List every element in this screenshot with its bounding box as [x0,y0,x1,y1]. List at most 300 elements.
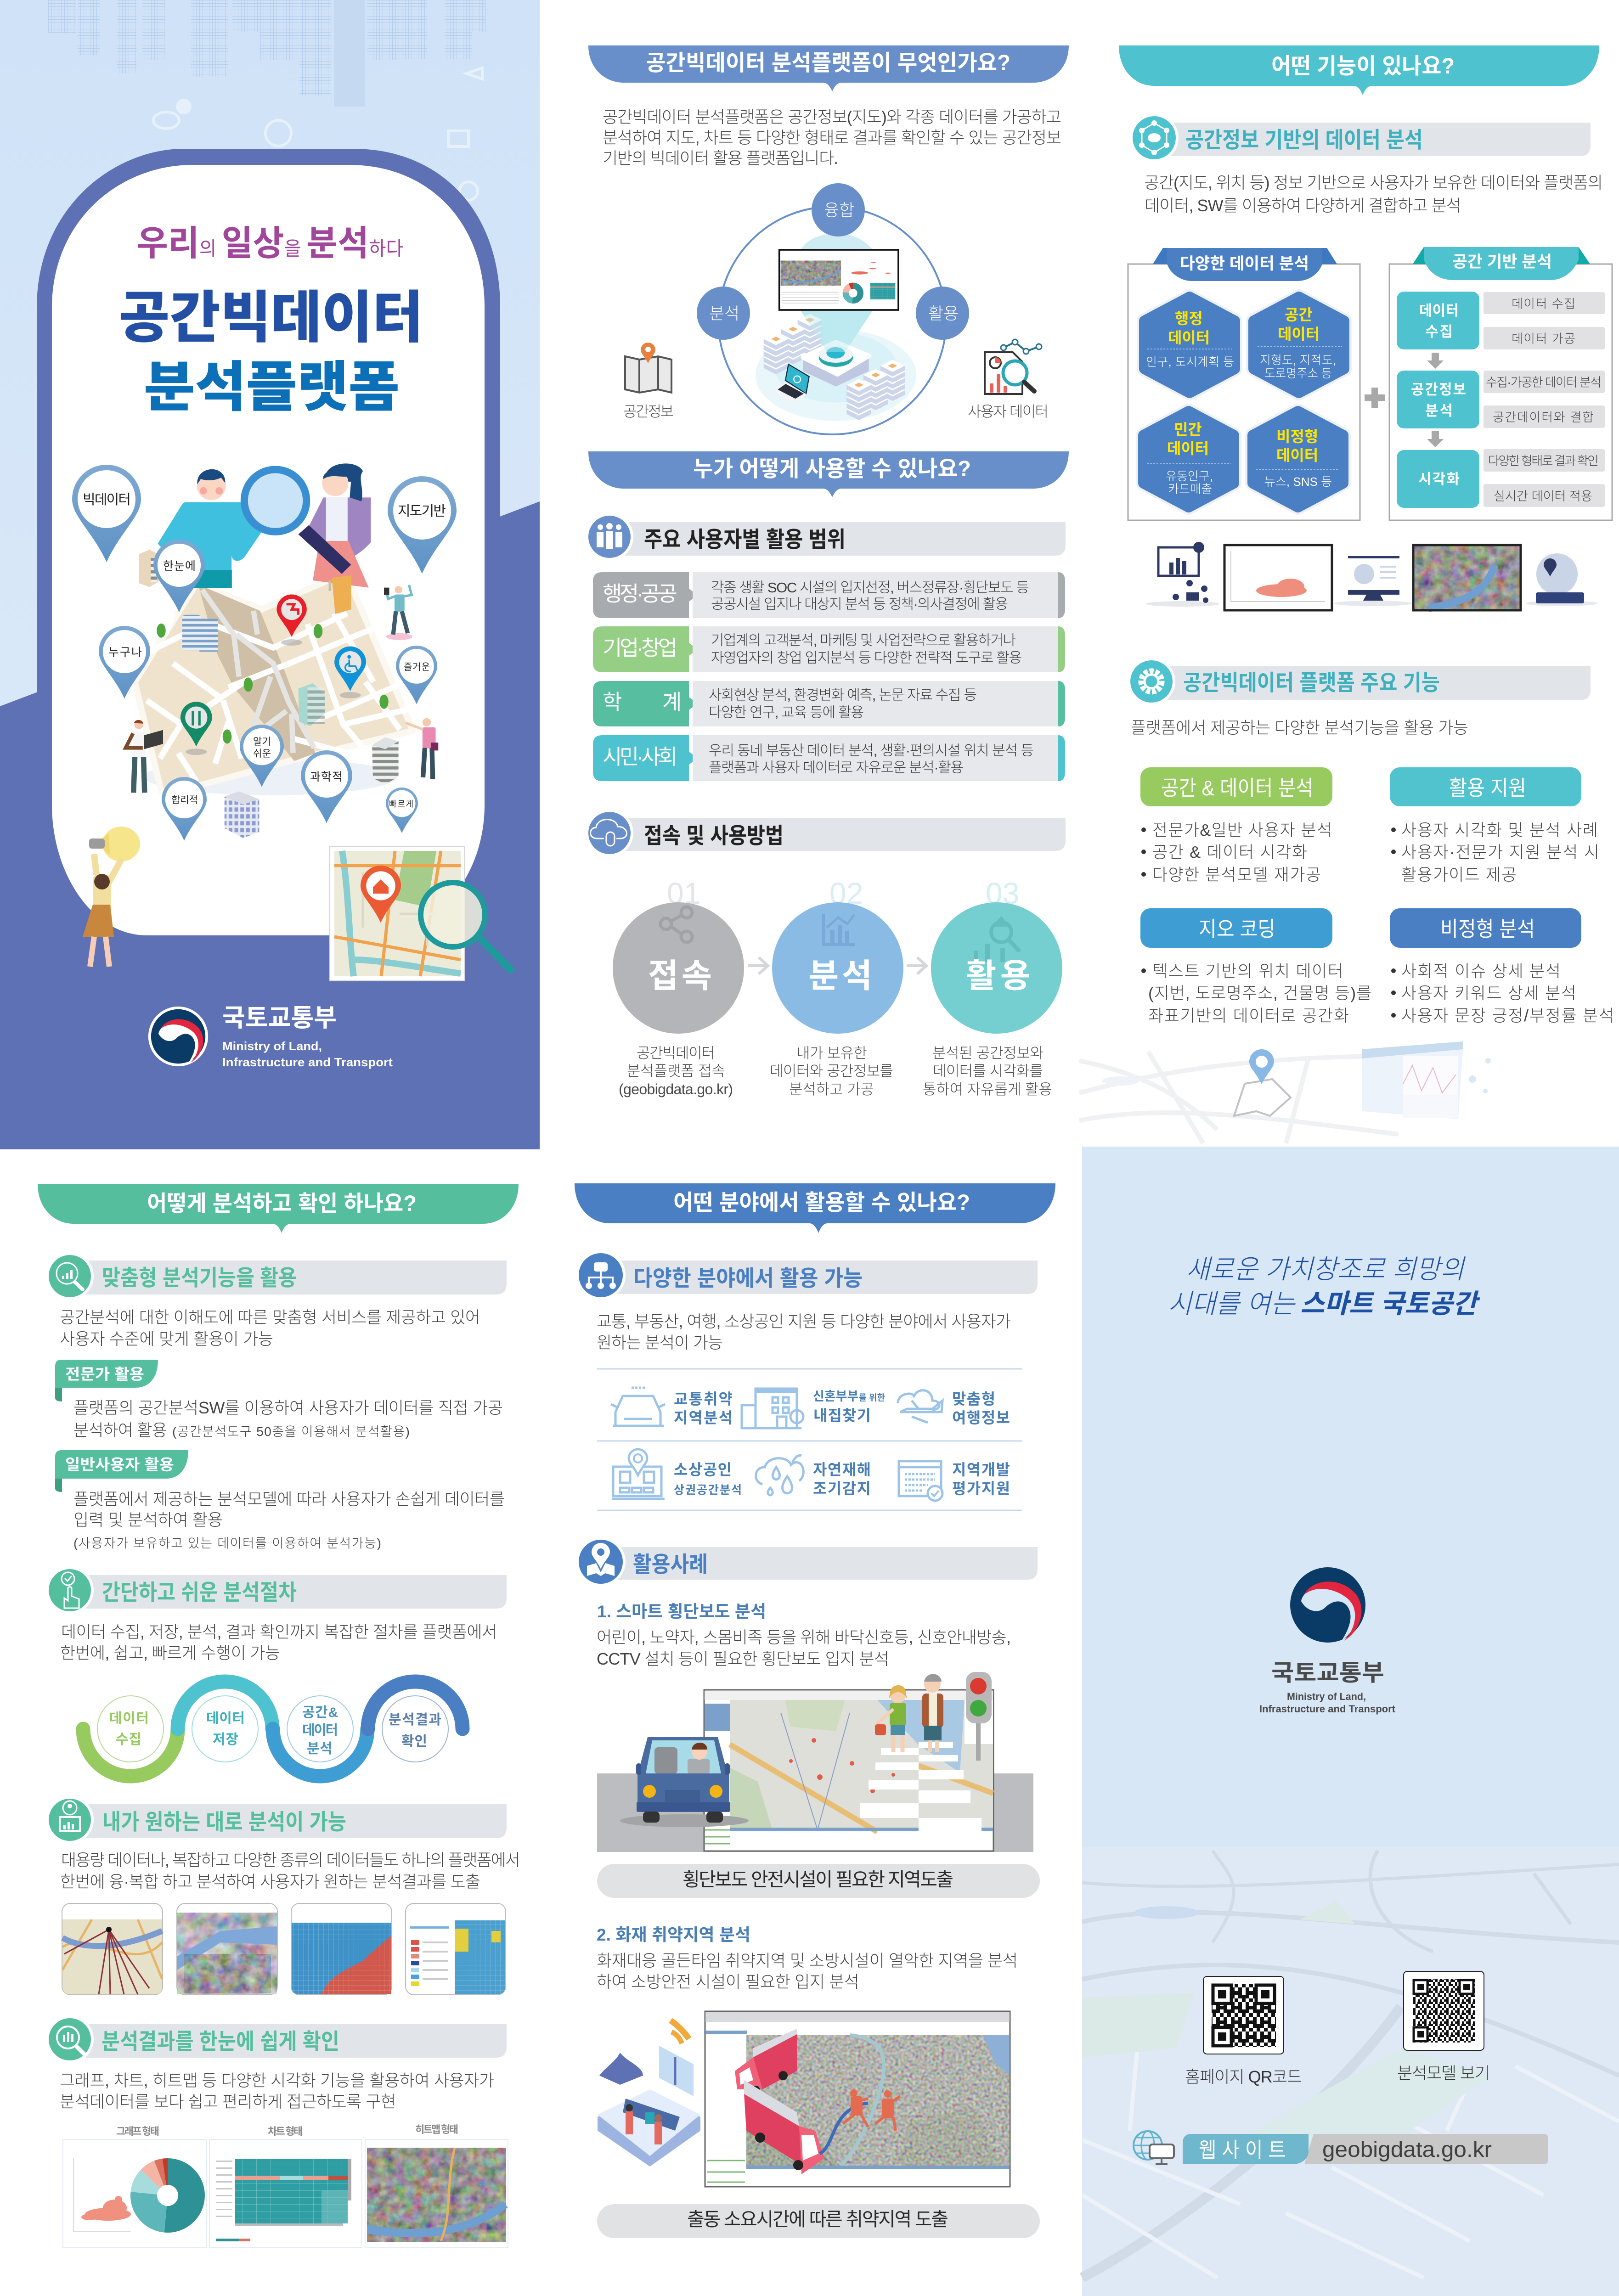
field: housing: 신혼부부를 위한 [813,1390,885,1403]
section header: spatial analysis [1130,113,1591,162]
keyword pins: 지도기반 [398,504,446,519]
user row: business: 자영업자의 창업 입지분석 등 다양한 전략적 도구로 활용 [711,650,1022,666]
building: office [225,791,259,838]
laptop [772,364,809,403]
firefighters [843,2089,900,2131]
user row: business [593,626,1065,672]
icon: user data: 사용자 데이터 [968,403,1049,420]
hexagon: spatial data: 공간 [1285,306,1313,323]
fire truck two [744,2080,824,2174]
field: traffic: 지역분석 [674,1409,733,1426]
banner [575,1183,1055,1233]
step 2: analysis: 데이터와 공간정보를 [770,1063,893,1079]
hub [801,311,873,387]
icon: spatial info map: 공간정보 [623,403,674,420]
expert text [73,1398,503,1440]
building: orange [328,575,351,614]
case 2 heading: 2. 화재 취약지역 분석 [597,1925,750,1944]
paragraph: 한번에 융·복합 하고 분석하여 사용자가 원하는 분석결과를 도출 [60,1872,480,1891]
step: visualise: 다양한 형태로 결과 확인 [1488,454,1599,468]
website bar: geobigdata.go.kr [1322,2138,1492,2162]
faded map illustration [1079,1041,1491,1143]
city map [135,573,413,791]
feature: support: 사용자·전문가 지원 분석 시 [1401,843,1599,861]
hexagon: spatial data: 데이터 [1278,326,1320,343]
section header: at a glance: 분석결과를 한눈에 쉽게 확인 [102,2030,339,2054]
screenshot [705,2011,1010,2187]
field: travel: 여행정보 [952,1409,1010,1426]
user row: academia [593,681,1065,726]
user row: business: 기업계의 고객분석, 마케팅 및 사업전략으로 활용하거나 [711,632,1016,648]
car [620,1737,749,1827]
step: result: 분석결과 [389,1712,441,1728]
arrow down [1427,431,1444,447]
hexagon: private data: 카드매출 [1168,482,1212,496]
hexagon: private data [1144,411,1234,507]
panel: cover [0,0,540,1149]
building: teal [298,683,325,726]
cover tagline: 우리의 일상을 분석하다 [137,224,403,263]
analysis map card with magnifier [330,847,511,981]
icon: globe and monitor [1134,2131,1174,2164]
screenshot: legend map [406,1903,506,1995]
paragraph: 공간분석에 대한 이해도에 따른 맞춤형 서비스를 제공하고 있어 [60,1308,480,1327]
feature: unstructured: 사용자 키워드 상세 분석 [1401,984,1576,1002]
website bar: 웹 사 이 트 [1199,2138,1286,2162]
step: visualise: 실시간 데이터 적용 [1494,490,1592,503]
user row: citizens: 플랫폼과 사용자 데이터로 자유로운 분석·활용 [709,760,964,776]
hexagon: admin data: 데이터 [1168,329,1210,346]
user row: public: 각종 생활 SOC 시설의 입지선정, 버스정류장·횡단보도 등 [711,580,1029,596]
keyword pins [72,465,457,841]
icon: head monitor [1334,556,1412,606]
hexagon: spatial data: 도로명주소 등 [1264,366,1332,380]
hexagon: unstructured data [1253,411,1343,507]
intro paragraph: 기반의 빅데이터 활용 플랫폼입니다. [603,149,838,168]
field: travel: 맞춤형 [952,1390,995,1407]
arrow [907,957,926,974]
general user text: 플랫폼에서 제공하는 분석모델에 따라 사용자가 손쉽게 데이터를 [73,1490,505,1508]
feature: spatial data: 전문가&일반 사용자 분석 [1152,821,1332,839]
QR code: homepage: 홈페이지 QR코드 [1185,2067,1302,2086]
step: analyse: 분석 [307,1741,333,1756]
magnifier and woman [244,463,371,588]
feature: geocoding: (지번, 도로명주소, 건물명 등)를 [1148,984,1371,1002]
section header: spatial analysis: 공간정보 기반의 데이터 분석 [1185,128,1423,152]
banner: 어떻게 분석하고 확인 하나요? [147,1192,417,1216]
field: disaster: 조기감지 [813,1480,871,1497]
chart: graph form [63,2126,206,2248]
step 3: use: 데이터를 시각화를 [933,1063,1043,1079]
step 3: use: 03 [986,876,1019,910]
expert text: (공간분석도구 50종을 이용해서 분석활용) [172,1424,410,1439]
step: analyse: 공간& [302,1705,338,1720]
step 2: analysis: 분석하고 가공 [789,1081,874,1097]
user row: academia: 학 [603,690,622,714]
field: disaster [756,1455,871,1497]
keyword pins: 알기 [253,737,271,747]
cover title [119,287,423,418]
platform diagram [697,183,969,434]
feature: unstructured: 사용자 문장 긍정/부정률 분석 [1401,1006,1614,1025]
back cover slogan: 시대를 여는 [1168,1289,1296,1319]
step: collect: 데이터 수집 [1512,297,1575,311]
hexagon: unstructured data: 비정형 [1276,428,1318,445]
paragraph: 대용량 데이터나, 복잡하고 다양한 종류의 데이터들도 하나의 플랫폼에서 [61,1851,520,1869]
hexagon: spatial data: 지형도, 지적도, [1260,353,1336,367]
feature: unstructured: 비정형 분석 [1440,917,1535,941]
section header: access: 접속 및 사용방법 [644,824,784,848]
keyword pins: 쉬운 [253,748,271,759]
feature: support [1390,767,1599,884]
light bulb girl [83,827,140,967]
paragraph [597,1312,1011,1352]
panel: diverse data analysis [1128,248,1360,520]
step 1: access: 공간빅데이터 [637,1045,715,1061]
ministry logo white [148,1004,393,1069]
section header: custom [46,1252,507,1300]
case 2 caption: 출동 소요시간에 따른 취약지역 도출 [687,2209,948,2230]
chart: heatmap form: 히트맵 형태 [415,2124,458,2135]
chart: table form: 차트 형태 [268,2126,303,2137]
case 1 heading: 1. 스마트 횡단보도 분석 [597,1602,766,1621]
scatter monitor [1224,545,1332,610]
case 2 caption [597,2204,1040,2238]
hexagon: spatial data [1254,297,1344,393]
section header: simple procedure: 간단하고 쉬운 분석절차 [102,1581,297,1605]
step: collect [97,1696,164,1762]
taegeuk symbol [1290,1567,1365,1643]
case 1 paragraph: CCTV 설치 등이 필요한 횡단보도 입지 분석 [597,1649,889,1668]
hexagon: unstructured data: 뉴스, SNS 등 [1264,475,1332,489]
ministry logo white: Infrastructure and Transport [222,1055,393,1069]
paragraph: 분석데이터를 보다 쉽고 편리하게 접근하도록 구현 [60,2092,396,2111]
field: housing: 내집찾기 [813,1407,871,1424]
feature: geocoding: 텍스트 기반의 위치 데이터 [1152,962,1343,980]
step: analyse: 공간데이터와 결합 [1493,411,1594,424]
intro paragraph: 공간빅데이터 분석플랫폼은 공간정보(지도)와 각종 데이터를 가공하고 [603,107,1061,126]
step: analyse: 데이터 [302,1723,338,1738]
ministry logo: 국토교통부 [1271,1660,1384,1686]
banner: 어떤 분야에서 활용할 수 있나요? [673,1191,970,1215]
tag: expert use: 전문가 활용 [65,1366,144,1383]
ministry logo white: Ministry of Land, [222,1039,322,1053]
step: result: 확인 [401,1734,427,1749]
feature: unstructured: 사회적 이슈 상세 분석 [1401,962,1561,980]
case 1 caption: 횡단보도 안전시설이 필요한 지역도출 [683,1869,953,1890]
step 2: analysis: 02 [829,876,863,910]
user row: business: 기업·창업 [603,636,677,660]
field: housing [742,1389,885,1428]
background road map [1082,1851,1619,2278]
step: visualise [1397,449,1605,508]
banner [38,1184,519,1233]
icon: user data [968,339,1049,420]
node: analysis: 분석 [709,304,739,323]
case 2 paragraph: 하여 소방안전 시설이 필요한 입지 분석 [597,1972,859,1991]
step 1: access: (geobigdata.go.kr) [619,1081,733,1097]
paragraph: 그래프, 차트, 히트맵 등 다양한 시각화 기능을 활용하여 사용자가 [60,2071,494,2090]
step: visualise: 시각화 [1418,471,1460,487]
user row: public: 행정·공공 [603,582,677,606]
building: grey [372,737,399,784]
map monitor [1413,545,1521,610]
keyword pins: 빅데이터 [83,492,131,507]
step: collect: 데이터 가공 [1512,332,1575,346]
cover title: 분석플랫폼 [144,357,400,418]
section header: as you want: 내가 원하는 대로 분석이 가능 [102,1810,346,1835]
paragraph [60,1308,480,1348]
panel: features [1079,45,1614,1143]
keyword pins: 누구나 [108,646,142,659]
step: collect: 수집 [116,1732,141,1747]
expert text: 분석하여 활용 [73,1421,167,1440]
section header: main functions [1128,658,1591,705]
hexagon: private data: 유동인구, [1166,469,1213,483]
case 1 paragraph [597,1628,1011,1668]
section header: fields: 다양한 분야에서 활용 가능 [633,1266,863,1291]
taegeuk symbol [148,1007,208,1066]
ministry logo: Ministry of Land, [1287,1691,1366,1702]
cover title: 공간빅데이터 [119,287,423,349]
step: analyse [1397,371,1605,428]
paragraph: 원하는 분석이 가능 [597,1333,723,1352]
case 1 caption [597,1864,1040,1898]
step 1: access: 분석플랫폼 접속 [627,1063,725,1079]
user row: public [593,572,1065,618]
user row: academia: 다양한 연구, 교육 등에 활용 [709,704,864,720]
panel: diverse data analysis: 다양한 데이터 분석 [1180,255,1309,273]
field: small business: 소상공인 [674,1461,732,1478]
fire truck one [735,2029,797,2095]
feature: spatial data [1140,767,1332,884]
step 3: use: 분석된 공간정보와 [932,1045,1044,1061]
case 2 illustration [598,2011,1010,2187]
case 1 illustration [597,1672,1033,1852]
feature: geocoding: 좌표기반의 데이터로 공간화 [1148,1006,1349,1025]
back cover slogan: 새로운 가치창조로 희망의 [1186,1255,1466,1284]
user row: citizens: 우리 동네 부동산 데이터 분석, 생활·편의시설 위치 분석 등 [709,743,1034,759]
feature: geocoding [1140,908,1371,1025]
step: analyse: 분석 [1425,403,1453,419]
section header: as you want [46,1796,507,1844]
building: blue towers [182,615,218,652]
section header: user scope: 주요 사용자별 활용 범위 [644,528,846,552]
section header: main functions: 공간빅데이터 플랫폼 주요 기능 [1183,671,1440,695]
node: fusion [812,183,865,236]
control room isometric [598,2020,700,2167]
paragraph: 플랫폼에서 제공하는 다양한 분석기능을 활용 가능 [1131,718,1468,737]
step: collect [1397,292,1605,349]
icon: chart robot [1146,542,1219,607]
field: disaster: 자연재해 [813,1461,871,1478]
ministry logo [1259,1567,1396,1715]
chart: heatmap form [365,2124,508,2248]
step 2: analysis: 내가 보유한 [796,1045,867,1061]
general user text: (사용자가 보유하고 있는 데이터를 이용하여 분석가능) [73,1536,381,1550]
white rounded card [52,165,485,935]
feature: spatial data: 공간 & 데이터 시각화 [1152,843,1307,861]
QR code: model view: 분석모델 보기 [1397,2064,1490,2082]
chart: table form [209,2126,362,2248]
feature: unstructured [1390,908,1614,1025]
process wave [83,1682,463,1776]
icon row [1146,542,1597,610]
paragraph: 사용자 수준에 맞게 활용이 가능 [60,1329,273,1348]
pedestrians [875,1674,943,1752]
keyword pins: 즐거운 [404,662,430,672]
section header: fields [576,1250,1038,1300]
man [158,469,269,588]
node: use [916,287,969,340]
feature: geocoding: 지오 코딩 [1199,917,1275,941]
floating web icons [153,68,482,200]
keyword pins: 합리적 [171,795,198,805]
tag: general user: 일반사용자 활용 [65,1456,174,1473]
arrow down [1427,353,1444,369]
case 2 paragraph: 화재대응 골든타임 취약지역 및 소방시설이 열악한 지역을 분석 [597,1951,1018,1970]
paragraph: 한번에, 쉽고, 빠르게 수행이 가능 [60,1643,280,1662]
hexagon: private data: 데이터 [1167,440,1209,457]
step 3: use: 활용 [966,958,1031,995]
field: regional development: 평가지원 [952,1480,1010,1497]
user row: academia: 계 [662,690,682,714]
banner: what is it: 공간빅데이터 분석플랫폼이 무엇인가요? [646,51,1010,75]
step 3: use [923,876,1062,1097]
feature: spatial data: 공간 & 데이터 분석 [1161,776,1314,800]
paragraph: 데이터, SW를 이용하여 다양하게 결합하고 분석 [1145,196,1461,215]
step 1: access: 01 [667,876,700,910]
icon: spatial info map [623,343,674,420]
user row: citizens: 시민·사회 [603,745,677,769]
section header: custom: 맞춤형 분석기능을 활용 [102,1266,297,1290]
keyword pins: 과학적 [310,771,343,783]
user row: academia: 사회현상 분석, 환경변화 예측, 논문 자료 수집 등 [709,687,977,703]
paragraph [60,2071,494,2111]
field: traffic: 교통취약 [674,1390,733,1407]
hexagon: admin data: 행정 [1175,310,1203,327]
back cover slogan: 스마트 국토공간 [1300,1289,1481,1319]
section header: simple procedure [46,1566,507,1614]
cover illustration [126,463,438,838]
step: store [192,1696,258,1762]
paragraph: 공간(지도, 위치 등) 정보 기반으로 사용자가 보유한 데이터와 플랫폼의 [1144,173,1603,192]
field: regional development: 지역개발 [952,1461,1010,1478]
person pink [406,718,438,779]
feature: support: 활용 지원 [1449,776,1526,800]
ministry logo: Infrastructure and Transport [1259,1703,1396,1715]
field: small business [612,1449,742,1499]
field: travel [898,1390,1010,1426]
feature: support: 사용자 시각화 및 분석 사례 [1401,821,1598,839]
building: beige [139,550,158,587]
step: store: 저장 [213,1732,238,1747]
panel: what is the platform [586,45,1069,1097]
banner: features [1119,45,1599,95]
keyword pins: 빠르게 [389,799,413,809]
banner: who uses it [588,451,1069,497]
hexagon: private data: 민간 [1174,421,1202,438]
step 2: analysis [770,876,903,1097]
node: analysis [697,287,750,340]
section header: access [586,809,1066,857]
step 1: access: 접속 [648,958,712,995]
node: fusion: 융합 [824,201,854,219]
tag: expert use [55,1360,158,1401]
icon: traffic light [966,1672,992,1761]
paragraph: 교통, 부동산, 여행, 소상공인 지원 등 다양한 분야에서 사용자가 [597,1312,1011,1331]
QR code: model view [1397,1971,1490,2082]
step: analyse: 수집·가공한 데이터 분석 [1486,376,1602,389]
banner: features: 어떤 기능이 있나요? [1271,54,1455,79]
expert text: 플랫폼의 공간분석SW를 이용하여 사용자가 데이터를 직접 가공 [73,1398,503,1417]
hexagon: admin data: 인구, 도시계획 등 [1146,355,1234,369]
panel: spatial based analysis: 공간 기반 분석 [1452,253,1552,271]
icon: plus [1365,388,1385,408]
QR code: homepage [1185,1976,1302,2086]
intro paragraph: 분석하여 지도, 차트 등 다양한 형태로 결과를 확인할 수 있는 공간정보 [603,128,1061,147]
step 1: access [613,876,744,1097]
server stacks back [764,314,822,374]
section header: at a glance [46,2015,507,2063]
step: collect: 데이터 [109,1711,149,1726]
screenshot: blue map [177,1903,277,1995]
field: traffic [611,1388,733,1426]
field: small business: 상권공간분석 [674,1484,742,1497]
step: collect: 수집 [1425,324,1453,340]
panel: application fields [575,1183,1055,2238]
paragraph [60,1622,497,1662]
panel: back cover [1082,1147,1619,2296]
chart: graph form: 그래프 형태 [116,2126,159,2137]
general user text: 입력 및 분석하여 활용 [73,1510,223,1529]
step: store: 데이터 [206,1711,245,1726]
feature: spatial data: 다양한 분석모델 재가공 [1152,865,1321,884]
back cover slogan [1168,1255,1481,1319]
ministry logo white: 국토교통부 [222,1004,337,1032]
paragraph [60,1851,520,1891]
keyword pins: 한눈에 [163,560,196,573]
banner: who uses it: 누가 어떻게 사용할 수 있나요? [693,457,971,481]
tag: general user [55,1450,188,1492]
hexagon: admin data [1145,297,1235,393]
step 2: analysis: 분석 [808,958,872,995]
website bar [1134,2131,1548,2164]
step: collect: 데이터 [1419,303,1459,319]
skyline illustration [48,0,486,107]
section header: cases [576,1537,1038,1587]
case 2 paragraph [597,1951,1018,1991]
case 1 paragraph: 어린이, 노약자, 스몸비족 등을 위해 바닥신호등, 신호안내방송, [597,1628,1011,1647]
step: analyse [287,1696,353,1762]
person with phone [384,585,412,640]
step 3: use: 통하여 자유롭게 활용 [923,1081,1052,1097]
globe [801,233,873,327]
panel: how to analyse [38,1184,520,2248]
paragraph [1144,173,1603,215]
panel: spatial based analysis [1389,247,1612,520]
person laptop [126,720,163,793]
server stacks front [846,360,905,420]
section header: user scope [586,513,1066,561]
screenshot: grid map [291,1903,392,1995]
screenshot: flow map [62,1903,163,1995]
feature: support: 활용가이드 제공 [1401,865,1517,884]
field: regional development [899,1461,1010,1501]
user row: public: 공공시설 입지나 대상지 분석 등 정책·의사결정에 활용 [711,596,1008,612]
node: use: 활용 [928,304,959,323]
step: analyse: 공간정보 [1411,382,1466,398]
